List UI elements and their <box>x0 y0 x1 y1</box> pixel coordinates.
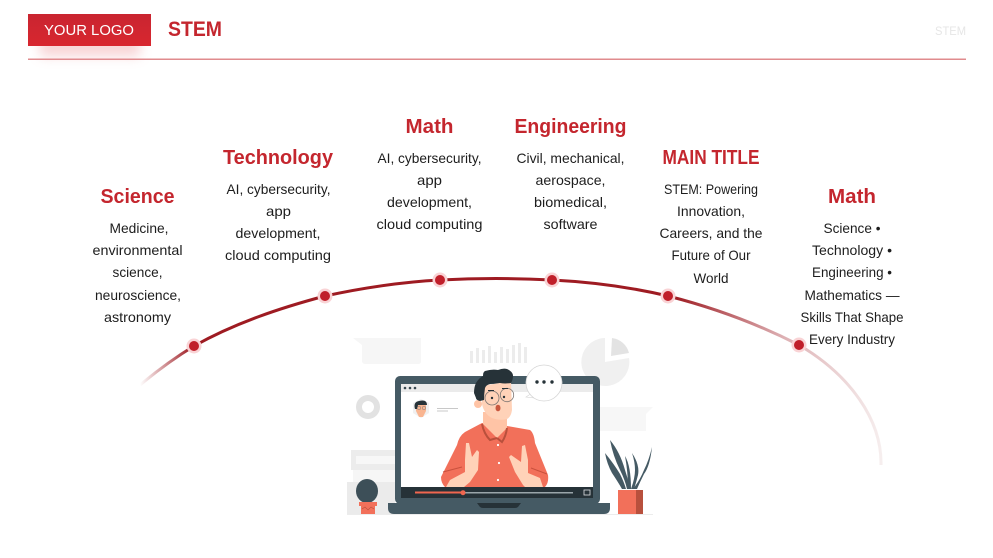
column: Main title: MAIN TITLE <box>662 147 760 169</box>
column: Math summary: Engineering • <box>812 264 892 280</box>
milestone dot 6 <box>792 338 806 352</box>
column: Science: environmental <box>92 242 182 258</box>
milestone dot 5 <box>660 288 676 304</box>
header right label: STEM <box>935 24 966 38</box>
column: Math: development, <box>387 194 472 210</box>
logo badge: YOUR LOGO <box>44 22 134 39</box>
column: Math: app <box>417 172 442 188</box>
neck <box>483 412 507 438</box>
buttons <box>497 444 500 481</box>
column: Science <box>92 186 182 325</box>
timeline arc <box>140 272 881 465</box>
collar <box>482 424 507 442</box>
column: Technology: development, <box>236 225 320 241</box>
column: Technology <box>223 147 334 263</box>
column: Science: Medicine, <box>110 220 168 236</box>
video controls <box>401 487 593 498</box>
mini avatar <box>413 399 458 418</box>
column: Technology: app <box>266 203 291 219</box>
column: Engineering: software <box>544 216 598 232</box>
speech bubble <box>526 365 562 401</box>
sleeve cuffs <box>443 467 547 474</box>
header <box>28 14 966 60</box>
column: Math summary: Science • <box>824 220 881 236</box>
column: Science: astronomy <box>104 309 171 325</box>
laptop <box>388 376 610 514</box>
milestone dot 1 <box>186 338 202 354</box>
column: Engineering <box>514 116 626 232</box>
column: Main title: World <box>694 270 728 286</box>
column: Technology: Technology <box>223 147 334 169</box>
plant <box>605 440 652 514</box>
column: Main title <box>660 147 763 286</box>
column: Math summary: Math <box>828 186 876 208</box>
column: Math: AI, cybersecurity, <box>378 150 482 166</box>
column: Math <box>376 116 482 232</box>
column: Engineering: biomedical, <box>534 194 607 210</box>
column: Main title: Future of Our <box>672 247 751 263</box>
milestone dot 2 <box>318 288 332 304</box>
left hand <box>446 443 479 487</box>
column: Math summary: Every Industry <box>809 331 895 347</box>
header title: STEM <box>168 18 222 41</box>
face <box>482 381 512 420</box>
column: Main title: Innovation, <box>677 203 745 219</box>
column: Main title: STEM: Powering <box>664 181 758 197</box>
column: Technology: AI, cybersecurity, <box>226 181 330 197</box>
right hand <box>509 445 543 487</box>
logo badge <box>28 14 151 56</box>
column: Engineering: aerospace, <box>536 172 606 188</box>
column: Science: Science <box>100 186 174 208</box>
column: Science: neuroscience, <box>95 287 181 303</box>
column: Math summary: Mathematics — <box>804 287 900 303</box>
column: Math summary: Technology • <box>812 242 892 258</box>
hair <box>474 369 513 401</box>
column: Math summary <box>800 186 904 347</box>
column: Math summary: Skills That Shape <box>800 309 904 325</box>
mouth <box>496 405 500 411</box>
glasses <box>485 388 514 405</box>
ear <box>474 400 482 408</box>
background charts and shapes <box>347 338 653 515</box>
cactus <box>356 479 378 514</box>
column: Engineering: Civil, mechanical, <box>516 150 624 166</box>
presenter <box>441 369 548 487</box>
column: Science: science, <box>112 264 162 280</box>
column: Technology: cloud computing <box>225 247 331 263</box>
column: Main title: Careers, and the <box>660 225 763 241</box>
column: Math: Math <box>406 116 454 138</box>
column: Math: cloud computing <box>376 216 482 232</box>
milestone dot 4 <box>544 272 560 288</box>
column: Engineering: Engineering <box>514 116 626 138</box>
shirt <box>441 423 548 487</box>
illustration: presenter on laptop <box>347 338 653 515</box>
milestone dot 3 <box>432 272 448 288</box>
